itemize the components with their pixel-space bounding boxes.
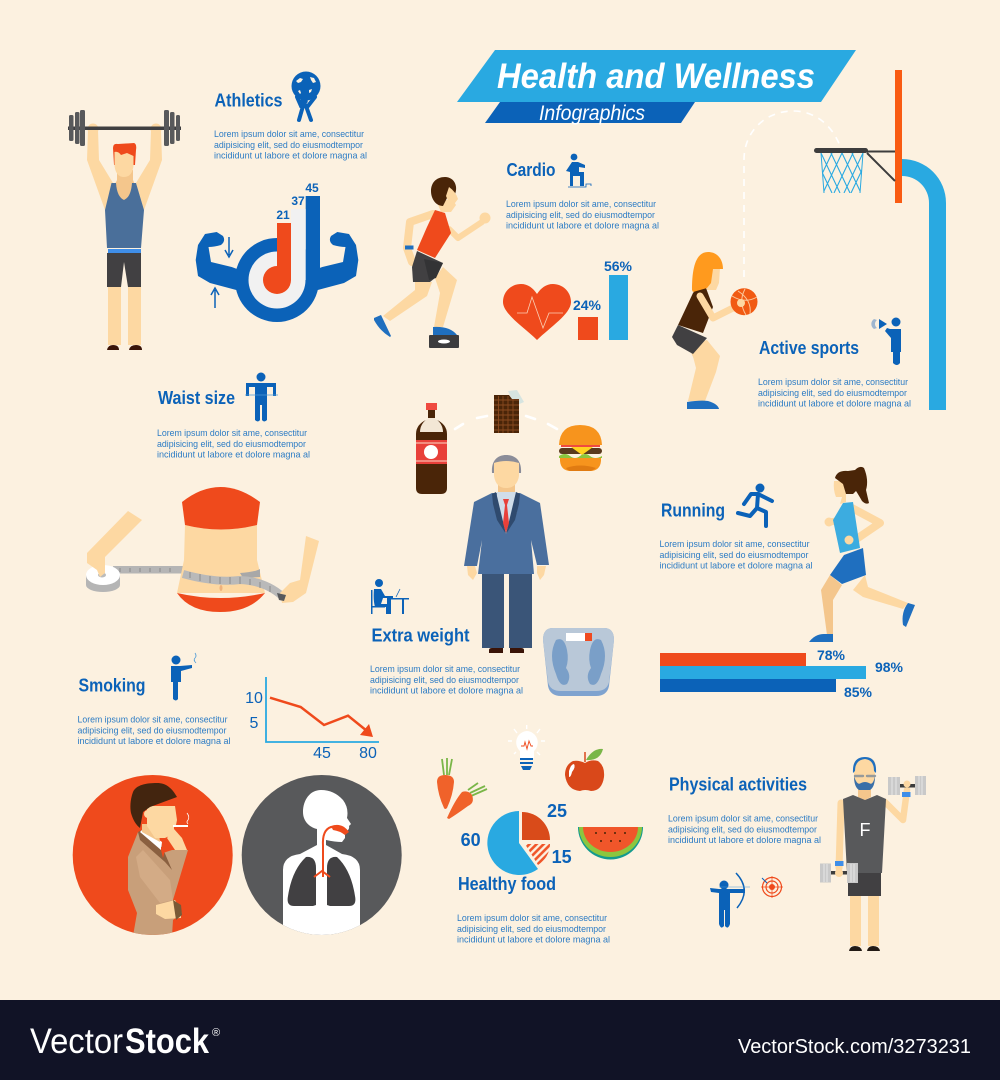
icon: target [761,876,783,898]
heading: Healthy food: Healthy food [458,874,556,894]
chart: muscle gauge 21 37 45 [196,181,358,322]
heading: Cardio: Cardio [506,160,556,180]
icon: chocolate bar [494,390,524,433]
value 24%: 24% [573,297,602,313]
text: physical activities description: incididunt ut labore et dolore magna al [668,834,821,845]
text: cardio description [506,198,659,230]
text: waist description: incididunt ut labore et dolore magna al [157,448,310,460]
icon: basketball [730,288,758,315]
dashed arc between foods [455,416,557,429]
footer bar [0,1000,1000,1080]
footer logo: Stock [125,1022,209,1061]
weightlifter figure [68,110,181,350]
title banner [457,50,856,125]
text: healthy food description: incididunt ut labore et dolore magna al [457,934,610,944]
value 56%: 56% [604,258,633,274]
text: smoking description: Lorem ipsum dolor sit ame, consectitur [78,714,228,724]
text: waist description [157,427,310,460]
bar chart: 24 and 56 percent [573,258,633,340]
label 10: 10 [245,690,263,707]
title: Health and Wellness [497,57,815,96]
value 45: 45 [305,181,319,195]
text: waist description: Lorem ipsum dolor sit ame, consectitur [157,427,307,438]
icon: burger [559,425,602,471]
text: running description [660,538,812,570]
text: healthy food description [457,912,610,944]
heading: Running: Running [661,500,725,520]
text: athletics description: Lorem ipsum dolor sit ame, consectitur [214,128,364,139]
icon: bathroom scale [543,628,614,696]
icon: watermelon [578,827,643,860]
icon: running person [738,484,772,526]
icon: person with megaphone [871,318,901,365]
label 5: 5 [250,715,259,732]
heading: Athletics: Athletics [214,90,282,110]
basketball hoop [814,70,946,410]
text: physical activities description: Lorem ipsum dolor sit ame, consectitur [668,812,818,824]
text: smoking description: incididunt ut labore et dolore magna al [78,735,230,746]
jersey letter F: F [860,820,870,840]
illustration: man smoking in red circle [73,775,233,936]
heading: Extra weight: Extra weight [372,626,470,646]
value 60: 60 [461,830,481,850]
text: running description: Lorem ipsum dolor sit ame, consectitur [660,538,810,549]
footer logo: ® [212,1027,220,1039]
heading: Active sports: Active sports [759,338,859,358]
value 85%: 85% [844,684,873,700]
text: smoking description [78,714,230,746]
text: waist description: adipisicing elit, sed do eiusmodtempor [157,438,306,449]
bar chart: running percentages [660,647,904,700]
panel: running [660,467,915,700]
value 25: 25 [547,801,567,821]
text: athletics description: incididunt ut labore et dolore magna al [214,150,367,160]
text: extra weight description: Lorem ipsum dolor sit ame, consectitur [370,663,520,674]
illustration: lungs in grey circle [242,775,402,940]
arrow: up [211,288,219,308]
dumbbell: lowered [820,861,858,883]
pie chart: 60 25 15 [461,801,572,875]
panel: athletics [68,72,367,350]
text: extra weight description: incididunt ut labore et dolore magna al [370,684,523,696]
label 45: 45 [313,745,331,762]
man with dumbbells [820,757,926,951]
text: running description: adipisicing elit, sed do eiusmodtempor [660,549,808,560]
text: physical activities description: adipisicing elit, sed do eiusmodtempor [668,824,817,834]
icon: carrots [437,758,487,819]
dumbbell: raised [888,776,926,797]
text: physical activities description [668,812,821,845]
icon: person at desk [371,579,409,614]
heading: Physical activities: Physical activities [669,774,807,794]
text: running description: incididunt ut labore et dolore magna al [660,560,812,570]
businessman with extra weight [464,455,549,653]
panel: extra weight [370,390,614,696]
text: active sports description: Lorem ipsum dolor sit ame, consectitur [758,376,908,387]
footer logo [30,1022,220,1061]
panel: healthy food [437,725,643,944]
icon: light bulb [508,725,545,770]
label 80: 80 [359,745,377,762]
text: healthy food description: Lorem ipsum dolor sit ame, consectitur [457,912,607,923]
illustration: waist measurement [86,487,319,612]
panel: waist size [86,372,319,612]
subtitle: Infographics [539,102,645,125]
running woman [809,467,915,642]
icon: cola bottle [416,403,447,494]
text: athletics description [214,128,367,160]
panel: smoking [73,653,402,940]
value 15: 15 [552,847,572,867]
value 37: 37 [291,194,305,208]
text: cardio description: adipisicing elit, sed do eiusmodtempor [506,209,655,220]
footer logo: Vector [30,1022,123,1061]
value 98%: 98% [875,659,904,675]
value 78%: 78% [817,647,846,663]
icon: atlas holding globe [292,72,320,120]
dashed ball trajectory [744,111,840,277]
text: smoking description: adipisicing elit, sed do eiusmodtempor [78,724,226,736]
heading: Waist size: Waist size [158,388,235,408]
panel: active sports [672,70,946,410]
line chart: declining trend [245,677,379,762]
text: extra weight description: adipisicing elit, sed do eiusmodtempor [370,674,519,685]
arrow: down [225,237,233,257]
icon: person with measuring tape [245,372,278,422]
text: cardio description: incididunt ut labore et dolore magna al [506,220,659,230]
icon: apple [565,749,604,791]
icon: heart with pulse [503,284,571,340]
panel: physical activities [668,757,926,951]
text: active sports description: adipisicing elit, sed do eiusmodtempor [758,387,907,398]
running figure on step [374,177,490,348]
icon: person smoking [171,653,196,700]
text: active sports description: incididunt ut labore et dolore magna al [758,398,911,408]
icon: archer [710,873,750,928]
panel: cardio [374,154,659,348]
text: active sports description [758,376,911,408]
footer image id: VectorStock.com/3273231 [738,1036,971,1058]
value 21: 21 [276,208,290,222]
woman shooting basketball [672,252,758,409]
icon: person on steps [566,154,591,187]
text: extra weight description [370,663,523,696]
heading: Smoking: Smoking [78,676,146,696]
text: healthy food description: adipisicing elit, sed do eiusmodtempor [457,923,606,934]
text: athletics description: adipisicing elit, sed do eiusmodtempor [214,139,363,150]
text: cardio description: Lorem ipsum dolor sit ame, consectitur [506,198,656,209]
